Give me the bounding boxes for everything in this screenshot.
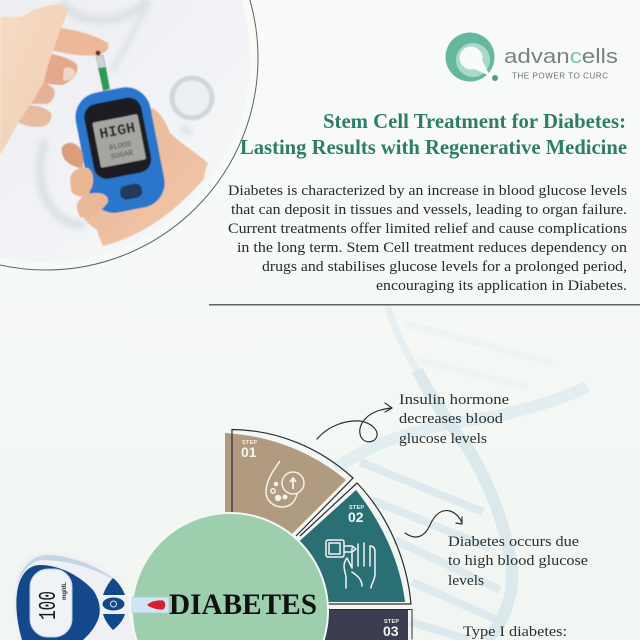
meter body: BLOOD <box>109 141 133 153</box>
icon: finger prick test <box>326 540 375 588</box>
callout: step 2: to high blood glucose <box>448 553 588 569</box>
step 2 label: STEP <box>349 505 364 511</box>
meter face <box>16 565 100 640</box>
intro paragraph: drugs and stabilises glucose levels for a prolonged period, <box>262 259 627 275</box>
right hand <box>77 108 208 246</box>
title: Stem Cell Treatment for Diabetes: <box>323 111 626 133</box>
callout: step 3: Type I diabetes: <box>463 624 567 640</box>
panel: step 3: 03 <box>383 623 399 639</box>
logo wordmark: advan cells <box>504 45 618 68</box>
step wheel <box>131 430 412 640</box>
intro paragraph: Current treatments offer limited relief and cause complications <box>228 221 627 237</box>
panel: step 2: 02 <box>348 509 364 525</box>
panel: step 1 <box>225 428 354 536</box>
callout: step 1: decreases blood <box>399 411 504 427</box>
meter body <box>74 86 166 214</box>
intro paragraph: Diabetes is characterized by an increase in blood glucose levels <box>228 183 627 199</box>
blood drop <box>147 600 165 610</box>
meter screen <box>30 569 72 637</box>
intro paragraph <box>228 183 628 294</box>
stethoscope backdrop <box>40 0 190 225</box>
meter body: HIGH <box>98 120 137 143</box>
photo: hands holding glucose meter <box>0 0 244 246</box>
arrow: step 1 callout <box>317 403 392 442</box>
meter unit: mg/dL <box>61 582 68 600</box>
photo circle outline <box>0 0 258 270</box>
panel: step 3 <box>325 610 412 640</box>
glucose meter illustration <box>14 552 169 640</box>
center circle <box>131 512 329 640</box>
intro paragraph: that can deposit in tissues and vessels, leading to organ failure. <box>231 202 627 218</box>
arrow: step 2 callout <box>405 511 462 537</box>
logo: advancells <box>446 32 618 82</box>
callout: step 1: Insulin hormone <box>399 392 509 408</box>
panel: step 1: 01 <box>241 444 257 460</box>
intro paragraph: in the long term. Stem Cell treatment reduces dependency on <box>237 240 628 256</box>
callout: step 1: glucose levels <box>399 431 487 447</box>
left hand palm <box>0 5 67 155</box>
divider <box>209 304 640 306</box>
intro paragraph: encouraging its application in Diabetes. <box>376 278 627 294</box>
callout: step 1 <box>399 392 509 447</box>
overlaying fingers <box>62 143 108 217</box>
icon: stethoscope chestpiece <box>172 78 212 118</box>
step 1 label: STEP <box>242 440 257 446</box>
panel: step 2 <box>300 482 412 605</box>
title <box>240 111 627 159</box>
icon: blood glucose drop <box>266 461 304 507</box>
center label: DIABETES <box>169 589 317 621</box>
meter reading: 100 <box>36 591 63 620</box>
logo tagline: THE POWER TO CURC <box>512 72 608 80</box>
title: Lasting Results with Regenerative Medicine <box>240 137 627 159</box>
meter body: SUGAR <box>110 150 134 162</box>
left hand fingers <box>18 28 109 127</box>
callout: step 2 <box>448 534 588 589</box>
step 3 label: STEP <box>384 619 399 625</box>
callout: step 2: levels <box>448 573 484 589</box>
test strip <box>96 50 110 91</box>
meter buttons <box>102 578 125 630</box>
background DNA helix <box>335 305 587 640</box>
logo mark <box>446 32 498 82</box>
test strip <box>132 597 169 613</box>
callout: step 2: Diabetes occurs due <box>448 534 579 550</box>
